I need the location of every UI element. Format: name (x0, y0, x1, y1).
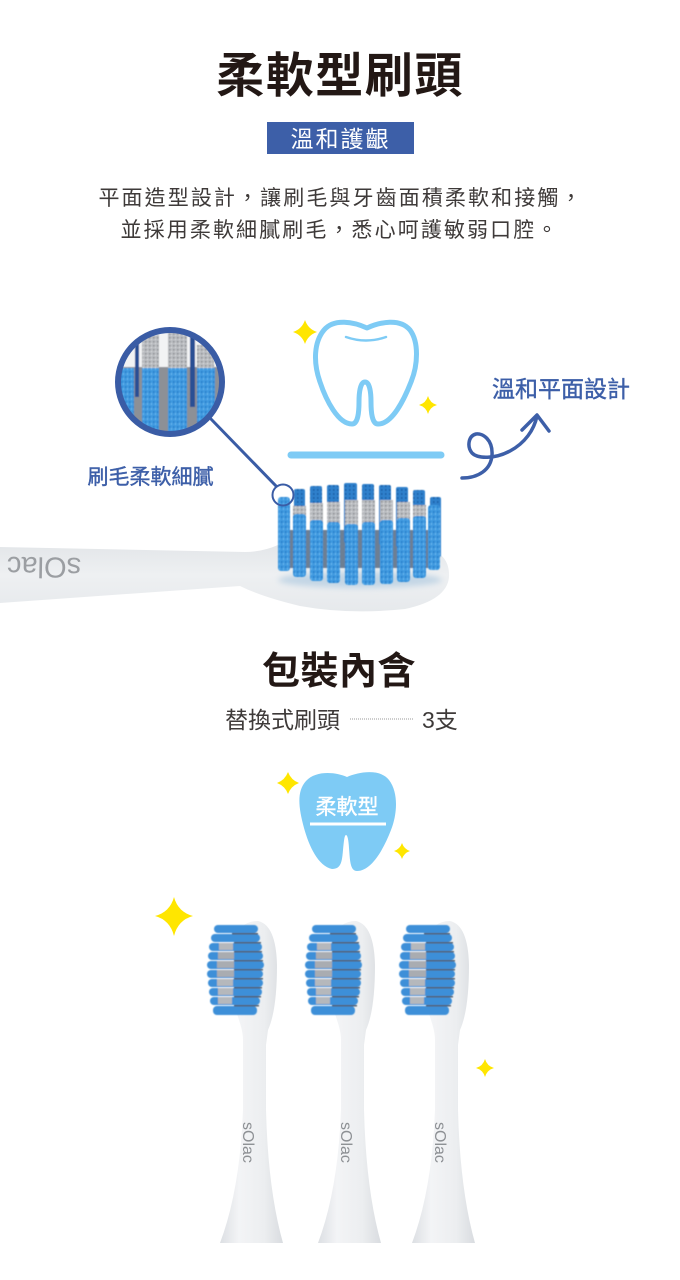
icon: sparkle right of tooth (419, 396, 437, 414)
badge: gentle gum care (267, 122, 414, 154)
connector line (210, 418, 277, 487)
description text: 並採用柔軟細膩刷毛，悉心呵護敏弱口腔。 (121, 219, 559, 242)
icon: sparkle by tooth right (394, 843, 410, 859)
brush handle and head (0, 545, 449, 611)
bristle tufts (278, 483, 441, 585)
title: 柔軟型刷頭 (216, 50, 464, 103)
replacement brush head 2 (305, 921, 381, 1243)
icon: sparkle by tooth left (277, 772, 299, 794)
target ring (272, 484, 294, 506)
magnified bristles (121, 333, 219, 431)
icon: large sparkle (155, 897, 193, 936)
icon: filled tooth with label: 柔軟型 (316, 796, 378, 819)
package item row: 替換式刷頭 (225, 707, 340, 733)
replacement brush head 3: sOlac (431, 1122, 448, 1163)
replacement brush head 2: sOlac (337, 1122, 354, 1163)
label: soft bristles: 刷毛柔軟細膩 (88, 466, 214, 489)
replacement brush head 1: sOlac (239, 1122, 256, 1163)
heading: package contents: 包裝內含 (262, 651, 416, 693)
badge: gentle gum care: 溫和護齦 (290, 126, 390, 152)
icon: filled tooth with label (299, 772, 396, 871)
toothbrush: large side view (0, 483, 449, 611)
replacement brush head 3 (399, 921, 475, 1243)
magnifier ring (118, 330, 222, 434)
package item row: 3支 (422, 707, 458, 733)
package item row (225, 707, 458, 733)
label: gentle flat design: 溫和平面設計 (492, 376, 630, 402)
bristle shadow (278, 572, 442, 588)
magnifier callout (115, 327, 294, 506)
arrow: curly (462, 415, 549, 478)
brand logo on handle: sOlac (7, 550, 81, 583)
icon: sparkle top left (293, 320, 317, 344)
description text: 平面造型設計，讓刷毛與牙齒面積柔軟和接觸， (98, 187, 584, 210)
icon: sparkle bottom right (476, 1059, 494, 1077)
replacement brush head 1 (207, 921, 283, 1243)
icon: tooth outline (315, 322, 416, 424)
description text (98, 187, 584, 242)
flat surface line (291, 452, 441, 458)
